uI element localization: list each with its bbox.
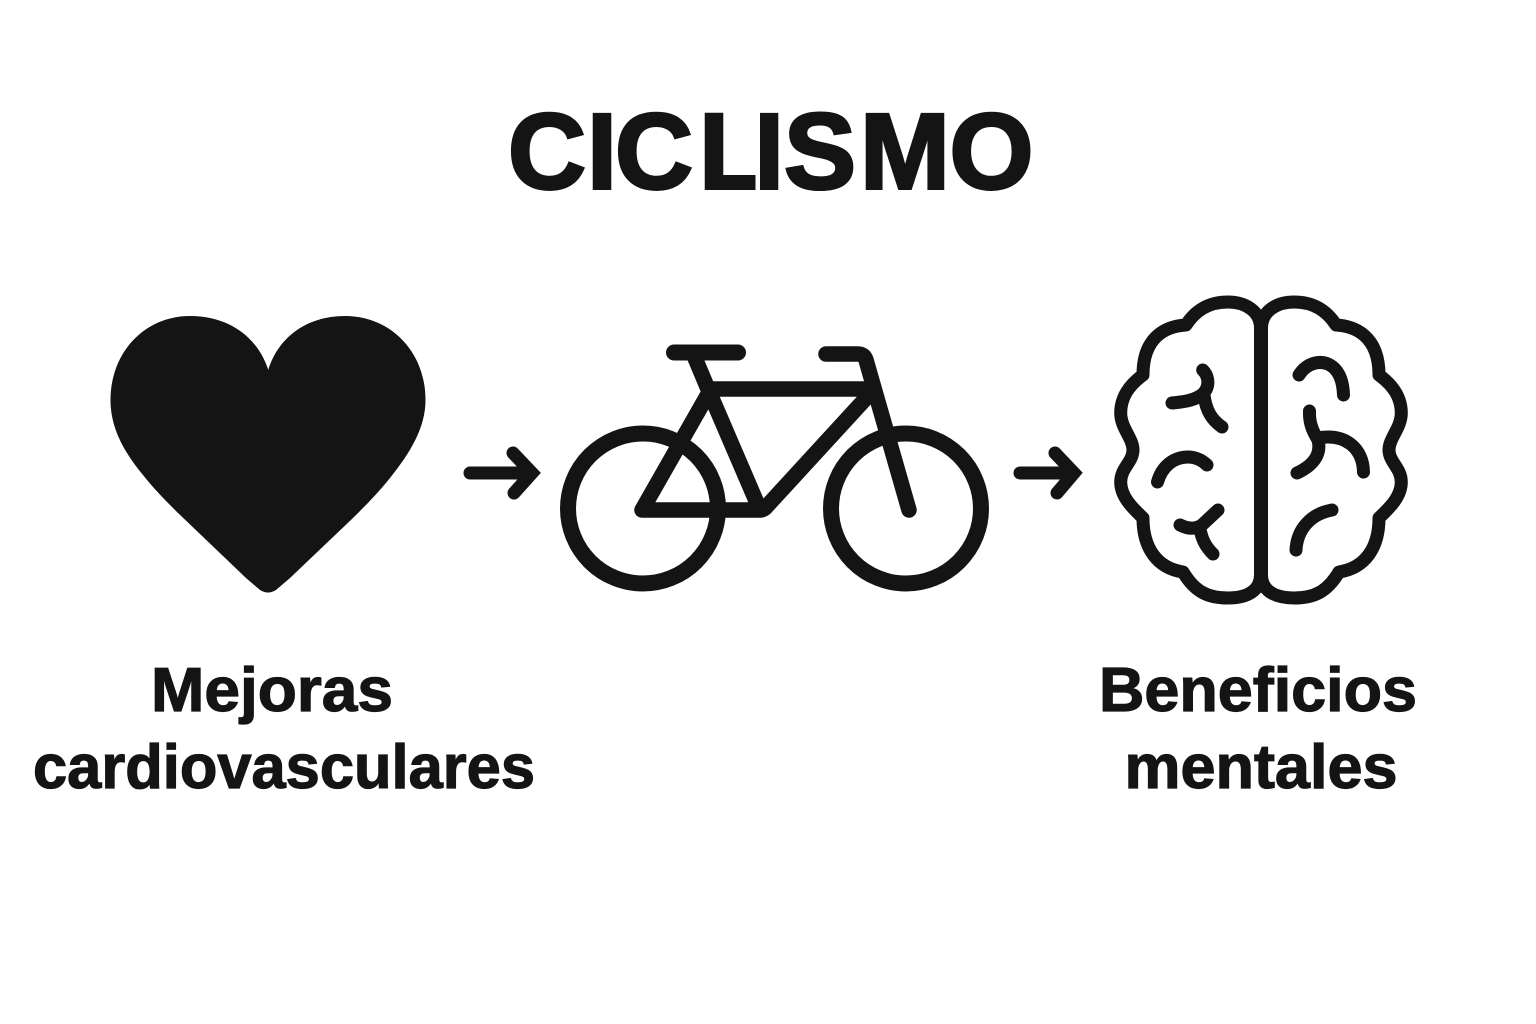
brain: right hemisphere <box>1262 302 1401 598</box>
brain: left hemisphere <box>1121 302 1260 598</box>
brain: left folds <box>1158 370 1222 554</box>
label: beneficios mentales: mentales <box>1124 733 1398 802</box>
brain: right folds <box>1296 362 1364 550</box>
icon: heart <box>110 316 426 592</box>
saddle <box>674 344 738 360</box>
arrow: heart to bicycle <box>470 453 532 493</box>
handlebar and fork <box>826 354 909 510</box>
icon: bicycle <box>568 352 981 584</box>
front and rear wheels <box>568 434 981 584</box>
label: mejoras cardiovasculares <box>33 656 535 802</box>
icon: brain <box>1121 302 1401 598</box>
arrow: bicycle to brain <box>1020 453 1074 493</box>
frame <box>642 358 868 510</box>
label: mejoras cardiovasculares: Mejoras <box>151 656 393 725</box>
label: mejoras cardiovasculares: cardiovasculares <box>33 733 535 802</box>
label: beneficios mentales: Beneficios <box>1099 656 1417 725</box>
title: CICLISMO <box>508 90 1034 212</box>
label: beneficios mentales <box>1099 656 1417 802</box>
